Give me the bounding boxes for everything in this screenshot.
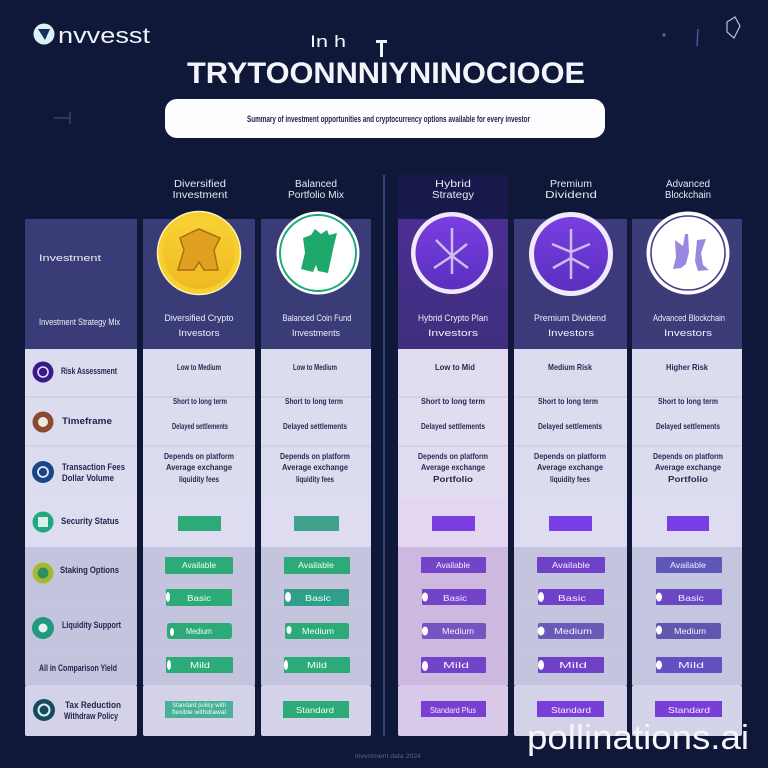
panel: label column: Tax Reduction [65, 700, 121, 710]
panel: column 1: flexible withdrawal [172, 709, 227, 716]
panel: column 5: Medium [674, 626, 706, 636]
panel: column 3: Short to long term [421, 396, 485, 406]
panel: column 1: Basic [187, 593, 212, 603]
panel: column 4: Medium [554, 626, 592, 636]
panel: column 4: Available [552, 560, 590, 570]
panel: column 4: Short to long term [538, 396, 598, 406]
panel: column 5: Short to long term [658, 396, 718, 406]
column titles: Diversified [174, 179, 226, 190]
panel: column 5: Investors [664, 328, 712, 339]
panel: column 1: Average exchange [166, 462, 232, 472]
panel: column 1: liquidity fees [179, 474, 219, 484]
panel: label column: Staking Options [60, 565, 119, 575]
column titles: Dividend [545, 190, 597, 201]
panel: column 3: Low to Mid [435, 362, 475, 372]
panel: column 4: Average exchange [537, 462, 603, 472]
panel: column 1: Short to long term [173, 396, 227, 406]
panel: column 2: Low to Medium [293, 362, 337, 372]
panel: column 2: Investments [292, 328, 340, 339]
column titles: Blockchain [665, 190, 711, 201]
panel: column 4: Investors [548, 328, 594, 339]
panel: column 3: Mild [443, 660, 469, 670]
panel: column 3: Standard Plus [430, 705, 476, 715]
panel: column 5: Portfolio [668, 474, 708, 484]
icon: time [32, 412, 54, 432]
panel: label column: Liquidity Support [62, 620, 121, 630]
column titles: Balanced [295, 179, 337, 190]
panel: column 2: Average exchange [282, 462, 348, 472]
panel: column 5: Delayed settlements [656, 421, 720, 431]
icon: staking [32, 562, 54, 584]
column titles: Advanced [666, 179, 710, 190]
panel: column 3: Basic [443, 593, 468, 603]
panel: column 3: Hybrid Crypto Plan [418, 313, 488, 324]
panel: column 4: Standard [551, 705, 591, 715]
panel: column 2: Short to long term [285, 396, 343, 406]
column titles: Premium [550, 179, 592, 190]
panel: column 3: Depends on platform [418, 451, 488, 461]
panel: column 1: Depends on platform [164, 451, 234, 461]
panel: label column: Risk Assessment [61, 366, 117, 376]
panel: column 2: liquidity fees [296, 474, 334, 484]
panel: label column [25, 219, 137, 736]
icon: risk [32, 362, 54, 382]
panel: column 5 [632, 212, 742, 736]
column titles [172, 179, 711, 201]
panel: column 4: Medium Risk [548, 362, 592, 372]
panel: column 3: Average exchange [421, 462, 485, 472]
panel: column 1: Standard policy with [172, 702, 226, 709]
icon: security [32, 512, 54, 532]
footer note: investment data 2024 [355, 754, 422, 760]
panel: column 1: Mild [190, 660, 210, 670]
panel: column 1: Diversified Crypto [164, 313, 234, 324]
panel: label column: Investment [39, 253, 101, 264]
panel: label column: All in Comparison Yield [39, 663, 117, 673]
panel: column 4: Delayed settlements [538, 421, 602, 431]
panel: column 3 [398, 212, 508, 736]
panel: column 1 [143, 212, 255, 736]
panel: column 4 [514, 212, 627, 736]
panel: column 3: Portfolio [433, 474, 473, 484]
panel: column 4: Mild [559, 660, 587, 670]
panel: column 4: liquidity fees [550, 474, 590, 484]
panel: column 5: Standard [668, 705, 710, 715]
panel: column 5: Average exchange [655, 462, 721, 472]
panel: column 1: Available [182, 560, 216, 570]
logo [34, 23, 150, 48]
panel: label column: Security Status [61, 516, 119, 526]
title: TRYTOONNNIYNINOCIOOE [187, 57, 585, 90]
panel: column 3: Available [436, 560, 470, 570]
logo: nvvesst [58, 23, 150, 48]
panel: column 5: Higher Risk [666, 362, 708, 372]
panel: column 4: Premium Dividend [534, 313, 606, 324]
panel: label column: Dollar Volume [62, 473, 114, 483]
icon: gold coin [158, 212, 240, 294]
panel: column 2: Mild [307, 660, 327, 670]
column titles: Portfolio Mix [288, 190, 344, 201]
subtitle pill [165, 99, 605, 138]
icon: white emblem [646, 212, 730, 294]
panel: column 2: Balanced Coin Fund [282, 313, 352, 324]
panel: column 3: Delayed settlements [421, 421, 485, 431]
panel: column 5: Advanced Blockchain [653, 313, 725, 324]
panel: column 2: Standard [296, 705, 334, 715]
panel: column 2: Available [298, 560, 334, 570]
column titles: Strategy [432, 190, 474, 201]
panel: label column: Withdraw Policy [64, 711, 118, 721]
panel: column 3: Investors [428, 328, 478, 339]
icon: purple tree [411, 212, 493, 294]
panel: column 2 [261, 212, 371, 736]
icon: fees [32, 461, 54, 483]
panel: column 1: Delayed settlements [172, 421, 228, 431]
subtitle pill: Summary of investment opportunities and cryptocurrency options available for every investor [247, 114, 530, 125]
sparkle decoration [54, 112, 70, 124]
panel: label column: Timeframe [62, 416, 112, 426]
panel: column 5: Basic [678, 593, 705, 603]
panel: column 2: Medium [302, 626, 334, 636]
panel: column 2: Delayed settlements [283, 421, 347, 431]
panel: column 2: Depends on platform [280, 451, 350, 461]
watermark: pollinations.ai [527, 719, 749, 757]
panel: column 5: Mild [678, 660, 704, 670]
panel: column 4: Basic [558, 593, 587, 603]
panel: column 2: Basic [305, 593, 332, 603]
panel: column 1: Low to Medium [177, 362, 221, 372]
icon: purple tree two [529, 212, 613, 296]
column divider [383, 175, 385, 736]
title [187, 32, 585, 90]
column titles: Investment [172, 190, 228, 201]
panel: column 5: Depends on platform [653, 451, 723, 461]
panel: label column: Investment Strategy Mix [39, 317, 120, 327]
top right decoration icon [663, 17, 740, 46]
icon: liquidity [32, 617, 54, 639]
column titles: Hybrid [435, 179, 471, 190]
icon: green emblem [276, 212, 360, 294]
title: In h [310, 32, 346, 51]
panel: label column: Transaction Fees [62, 462, 125, 472]
panel: column 3: Medium [442, 626, 474, 636]
panel: column 1: Investors [178, 328, 220, 339]
panel: column 5: Available [670, 560, 706, 570]
panel: column 1: Medium [186, 626, 212, 636]
panel: column 4: Depends on platform [534, 451, 606, 461]
icon: tax [33, 699, 55, 721]
